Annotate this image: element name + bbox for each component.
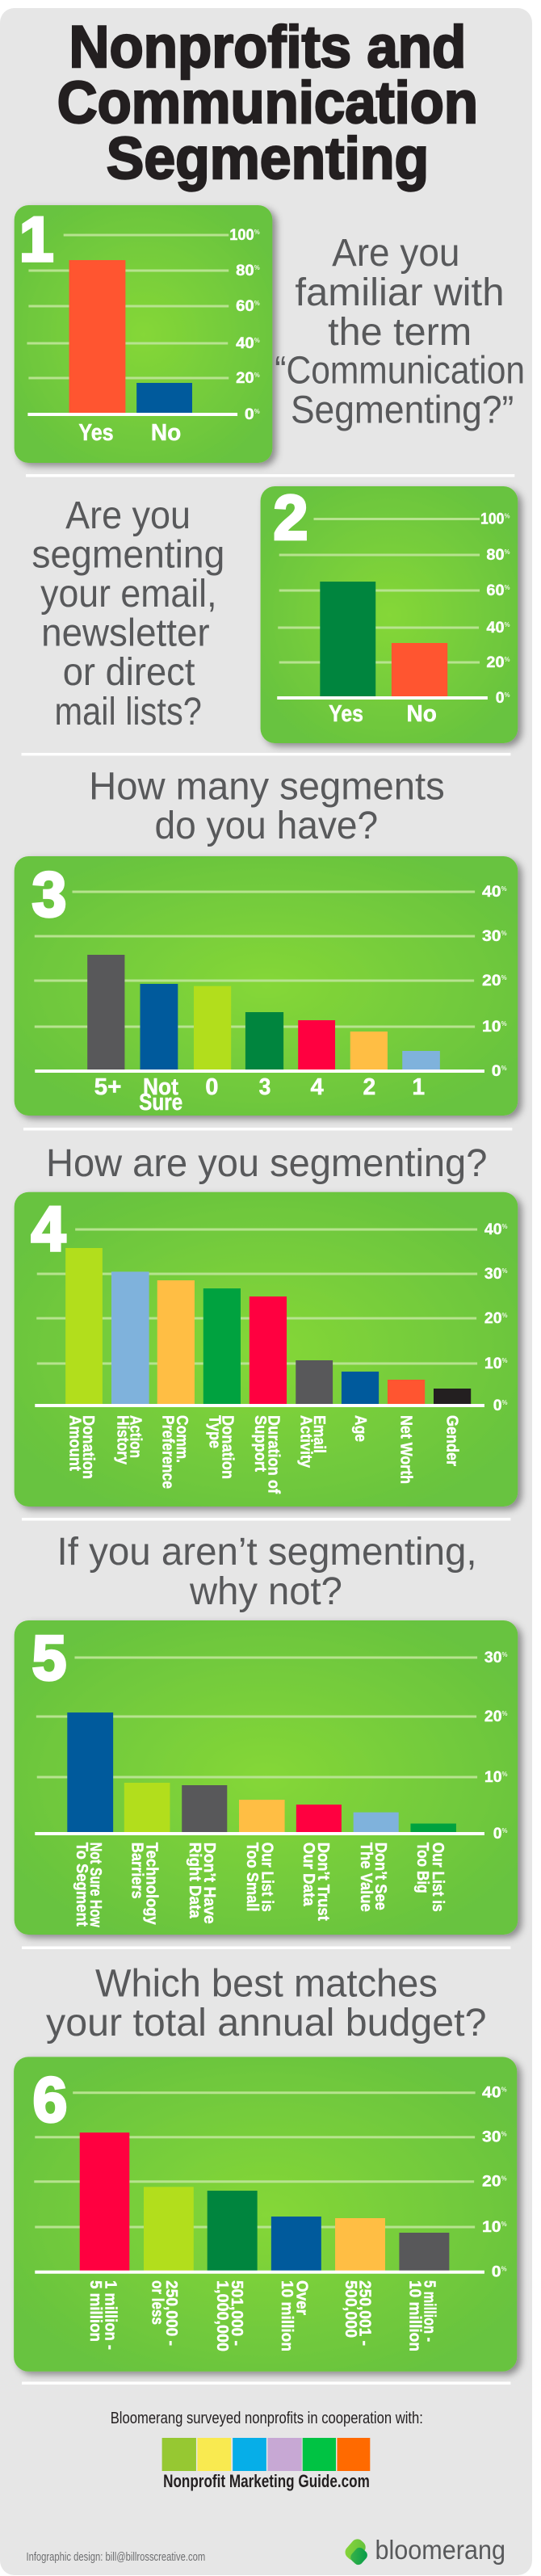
category labels 2 [329, 701, 437, 727]
heading: why not segmenting [57, 1531, 477, 1613]
category labels 6: 10 million [278, 2280, 296, 2351]
category labels 1: No [151, 420, 181, 446]
axis labels 1: % [254, 372, 260, 379]
heading: annual budget: Which best matches [95, 1962, 438, 2005]
gridlines 3 [34, 892, 475, 1027]
axis labels 2: % [505, 584, 510, 591]
axis labels 1: % [254, 408, 260, 415]
category labels 4: Donation [79, 1415, 98, 1479]
axis labels 3: % [501, 885, 507, 893]
category labels 4: Type [206, 1415, 224, 1448]
axis labels 2: % [505, 512, 510, 520]
axis labels 3: % [501, 1065, 507, 1072]
category labels 5: Don’t Have [200, 1843, 219, 1924]
category labels 2: No [407, 701, 437, 727]
axis labels 2: 20 [486, 654, 505, 671]
category labels 3: Not [143, 1074, 178, 1100]
question 1: Are you [332, 232, 459, 275]
bar: 0 [194, 986, 231, 1070]
designer credit: Infographic design: bill@billrosscreative.com [26, 2551, 205, 2564]
category labels 4: Activity [297, 1415, 316, 1468]
axis labels 1: % [254, 229, 260, 236]
question 2: your email, [40, 573, 216, 616]
question 1 [275, 232, 525, 432]
section number 4: 4 [31, 1194, 65, 1264]
logo: nonprofit marketing guide [162, 2438, 370, 2491]
section number 6: 6 [33, 2065, 67, 2135]
category labels 6: 250,001 - [356, 2280, 374, 2346]
bar: don't have right data [182, 1785, 227, 1833]
heading: how many segments [89, 765, 445, 847]
section number 1: 1 [19, 204, 54, 275]
wordmark: bloomerang [375, 2535, 505, 2565]
category labels 5: Too Small [243, 1843, 262, 1911]
category labels 4: Gender [443, 1415, 462, 1466]
axis labels 5: 20 [484, 1708, 502, 1725]
panel: chart 5 reasons not segmenting [15, 1620, 518, 1935]
bar: 250,001 to 500,000 [335, 2218, 385, 2271]
bar: 5+ [87, 955, 124, 1070]
category labels 6: 1,000,000 [213, 2280, 232, 2351]
question 2: newsletter [41, 611, 210, 655]
axis labels 4 [484, 1221, 508, 1414]
card background 2 [261, 486, 518, 743]
axis labels 3: 30 [482, 928, 501, 945]
panel: chart 4 how segmenting [15, 1192, 518, 1507]
category labels 5: Barriers [128, 1843, 147, 1899]
axis labels 1: % [254, 337, 260, 344]
title: Nonprofits and [69, 14, 466, 80]
bar: 250,000 or less [144, 2187, 194, 2271]
axis labels 2: 40 [486, 620, 505, 637]
category labels 2: Yes [329, 701, 363, 727]
axis labels 3: 40 [482, 884, 501, 901]
bar: action history [111, 1271, 149, 1405]
bar: yes 1 [69, 260, 125, 414]
card background 4 [15, 1192, 518, 1507]
axis baseline 6 [35, 2271, 484, 2274]
bar: list too big [410, 1824, 456, 1833]
bar: 5 to 10 million [399, 2233, 449, 2271]
category labels 4: Age [351, 1415, 370, 1442]
axis labels 4: % [502, 1267, 508, 1275]
axis labels 3: 0 [492, 1063, 501, 1080]
axis labels 2: 80 [486, 547, 505, 564]
category labels 5 [73, 1843, 447, 1927]
question 2: mail lists? [55, 691, 202, 733]
gridlines 2 [278, 519, 480, 662]
axis labels 2: 100 [480, 511, 505, 528]
category labels 5: Don’t Trust [314, 1843, 333, 1921]
axis labels 3: % [501, 974, 507, 981]
axis labels 3: % [501, 1020, 507, 1027]
category labels 4: Comm. [173, 1415, 191, 1463]
axis labels 5: % [502, 1827, 508, 1834]
category labels 4 [66, 1415, 462, 1494]
bar: don't see value [354, 1813, 399, 1833]
axis labels 4: % [502, 1223, 508, 1230]
panel: chart 2 segmenting lists [261, 483, 518, 743]
category labels 4: Amount [66, 1415, 84, 1471]
category labels 6: 250,000 - [162, 2280, 181, 2346]
axis labels 6: % [501, 2131, 507, 2138]
category labels 5: Our List is [429, 1843, 447, 1912]
category labels 5: The Value [357, 1843, 375, 1912]
bar: donation amount [65, 1248, 103, 1405]
axis labels 2: % [505, 621, 510, 628]
axis labels 1: 40 [236, 335, 254, 352]
axis labels 6: 20 [482, 2174, 501, 2191]
bar: 4 [298, 1020, 335, 1070]
axis baseline 1 [27, 413, 237, 416]
category labels 3: 2 [363, 1074, 375, 1100]
category labels 4: History [114, 1415, 132, 1464]
axis labels 4: 40 [484, 1221, 502, 1238]
question 2 [31, 494, 224, 733]
axis labels 4: 20 [484, 1310, 502, 1327]
logo: bloomerang [342, 2535, 505, 2567]
question 1: familiar with [295, 271, 505, 314]
bar: 3 [245, 1012, 283, 1070]
category labels 5: Technology [143, 1843, 161, 1925]
heading: why not segmenting: why not? [189, 1570, 342, 1613]
category labels 5: Not Sure How [86, 1843, 105, 1927]
axis labels 2: % [505, 656, 510, 663]
heading: annual budget [46, 1962, 486, 2044]
category labels 5: To Segment [73, 1843, 91, 1927]
category labels 4: Email [310, 1415, 329, 1453]
panel: chart 1 familiarity [15, 204, 272, 463]
bar: 501,000 to 1,000,000 [208, 2191, 258, 2271]
category labels 6: 10 million [406, 2280, 424, 2351]
bar: don't trust data [296, 1805, 342, 1833]
category labels 4: Support [251, 1415, 270, 1472]
gridlines 6 [34, 2093, 476, 2227]
axis labels 4: 0 [493, 1397, 502, 1414]
gridlines 1 [27, 235, 229, 378]
axis labels 5: 30 [484, 1649, 502, 1666]
category labels 5: Our Data [300, 1843, 318, 1906]
category labels 4: Net Worth [397, 1415, 416, 1484]
card background 5 [15, 1620, 518, 1935]
axis labels 3: 20 [482, 973, 501, 990]
category labels 6: 1 million - [101, 2280, 120, 2350]
axis labels 6: 30 [482, 2129, 501, 2146]
question 1: the term [328, 311, 472, 354]
axis labels 6: 10 [482, 2219, 501, 2236]
category labels 3: 5+ [94, 1074, 121, 1100]
section number 3: 3 [32, 859, 66, 930]
gridlines 5 [36, 1658, 477, 1777]
axis labels 1: 0 [245, 406, 254, 423]
category labels 3: 4 [311, 1074, 324, 1100]
title: Segmenting [107, 125, 429, 191]
heading: why not segmenting: If you aren’t segmenting, [57, 1531, 477, 1574]
axis labels 1: 100 [229, 227, 254, 244]
category labels 6: 501,000 - [228, 2280, 246, 2346]
bar: no 1 [136, 383, 192, 414]
card background 3 [15, 856, 518, 1116]
heading: how many segments: How many segments [89, 765, 445, 809]
axis labels 6: 0 [492, 2264, 501, 2281]
logo: nonprofit marketing guide: Nonprofit Marketing Guide.com [163, 2471, 370, 2491]
icon: bloomerang leaf [342, 2536, 369, 2567]
category labels 6 [86, 2280, 438, 2351]
category labels 4: Action [126, 1415, 145, 1458]
axis labels 4: % [502, 1312, 508, 1319]
axis labels 6 [482, 2085, 507, 2281]
heading: how are you segmenting: How are you segmenting? [46, 1142, 487, 1185]
category labels 3 [94, 1074, 425, 1116]
bar: 1 [402, 1051, 440, 1070]
survey credit text: Bloomerang surveyed nonprofits in cooperation with: [111, 2410, 423, 2427]
axis labels 1: 20 [236, 370, 254, 387]
category labels 3: 1 [412, 1074, 425, 1100]
bar: 1 to 5 million [80, 2133, 129, 2271]
card background 1 [15, 205, 272, 463]
axis labels 2: 0 [496, 690, 505, 707]
category labels 3: Sure [139, 1090, 182, 1116]
axis labels 6: % [501, 2266, 507, 2273]
bar: email activity [296, 1360, 333, 1405]
axis labels 6: 40 [482, 2085, 501, 2102]
card background 6 [14, 2057, 517, 2372]
axis labels 3 [482, 884, 507, 1080]
question 2: segmenting [31, 533, 224, 577]
axis labels 2: % [505, 548, 510, 556]
axis labels 5: 0 [493, 1826, 502, 1843]
axis baseline 3 [35, 1069, 484, 1073]
category labels 5: Too Big [413, 1843, 432, 1893]
category labels 6: 500,000 [342, 2280, 360, 2338]
question 2: or direct [63, 651, 195, 694]
axis baseline 2 [277, 696, 488, 700]
panel: chart 6 annual budget [14, 2057, 517, 2372]
bar: no 2 [392, 643, 447, 697]
axis labels 1: 80 [236, 263, 254, 279]
axis labels 6: % [501, 2175, 507, 2183]
axis baseline 5 [35, 1832, 484, 1835]
axis labels 4: % [502, 1357, 508, 1364]
bar: comm preference [157, 1280, 195, 1405]
axis labels 5: % [502, 1771, 508, 1778]
axis labels 3: % [501, 930, 507, 937]
category labels 6: 5 million - [421, 2280, 438, 2342]
section number 2: 2 [274, 483, 308, 553]
axis labels 4: 30 [484, 1266, 502, 1283]
category labels 4: Donation [218, 1415, 237, 1479]
bar: yes 2 [320, 582, 375, 697]
category labels 3: 3 [259, 1074, 270, 1100]
question 2: Are you [65, 494, 191, 537]
title [57, 14, 478, 191]
axis labels 1: % [254, 264, 260, 271]
category labels 1: Yes [78, 420, 114, 446]
axis labels 1: % [254, 300, 260, 307]
axis labels 5: % [502, 1651, 508, 1658]
bar: gender [434, 1389, 471, 1405]
category labels 3: 0 [205, 1074, 218, 1100]
axis labels 3: 10 [482, 1019, 501, 1036]
axis labels 2: 60 [486, 582, 505, 599]
question 1: Segmenting?” [291, 389, 514, 432]
axis labels 2: % [505, 691, 510, 699]
axis labels 5: 10 [484, 1769, 502, 1786]
bar: duration of support [250, 1296, 287, 1405]
category labels 6: or less [148, 2280, 166, 2325]
bar: net worth [388, 1380, 425, 1405]
axis labels 2 [480, 511, 510, 707]
bar: technology barriers [124, 1783, 170, 1833]
title: Communication [57, 69, 478, 136]
axis labels 1: 60 [236, 298, 254, 315]
bar: donation type [203, 1288, 241, 1405]
bar: 2 [350, 1032, 388, 1070]
category labels 5: Don’t See [371, 1843, 390, 1910]
category labels 6: Over [293, 2280, 311, 2315]
category labels 5: Right Data [186, 1843, 204, 1918]
axis labels 6: % [501, 2086, 507, 2094]
category labels 4: Preference [159, 1415, 177, 1489]
bar: not sure how to segment [67, 1712, 113, 1833]
bar: not sure [140, 984, 178, 1070]
axis labels 6: % [501, 2221, 507, 2228]
axis labels 5: % [502, 1710, 508, 1717]
bar: list too small [239, 1800, 285, 1833]
category labels 4: Duration of [264, 1415, 283, 1494]
bar: over 10 million [271, 2217, 321, 2271]
heading: how many segments: do you have? [154, 805, 378, 847]
gridlines 4 [36, 1229, 477, 1364]
section number 5: 5 [32, 1623, 66, 1693]
panel: chart 3 number of segments [15, 856, 518, 1116]
axis baseline 4 [35, 1404, 484, 1407]
bar: age [342, 1372, 379, 1405]
axis labels 4: 10 [484, 1355, 502, 1372]
category labels 5: Our List is [258, 1843, 276, 1912]
axis labels 1 [229, 227, 260, 423]
category labels 6: 5 million [86, 2280, 105, 2342]
heading: annual budget: your total annual budget? [46, 2002, 486, 2044]
axis labels 4: % [502, 1399, 508, 1406]
category labels 1 [78, 420, 181, 446]
axis labels 5 [484, 1649, 508, 1843]
